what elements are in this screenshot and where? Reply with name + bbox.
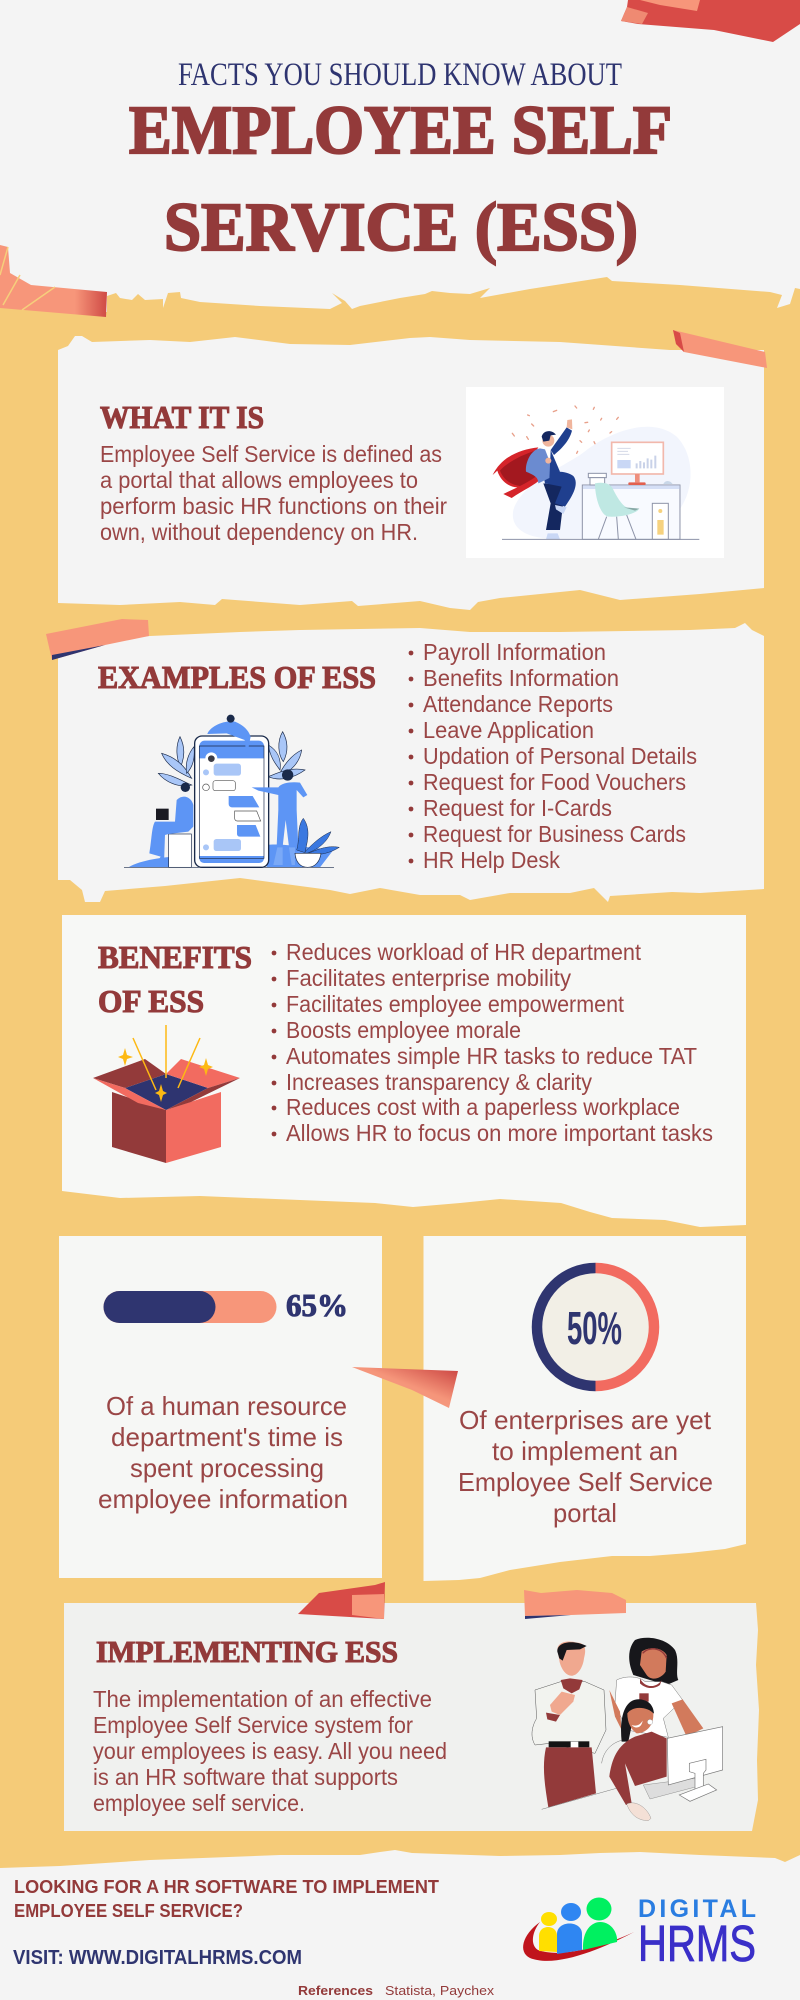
value: 65%	[286, 1287, 348, 1323]
main title line 2: SERVICE (ESS)	[164, 189, 638, 265]
bullet list: Increases transparency & clarity	[286, 1069, 592, 1095]
footer call to action	[13, 1877, 439, 1969]
heading: EXAMPLES OF ESS	[98, 659, 376, 695]
donut chart	[536, 1267, 656, 1387]
body text: Employee Self Service system for	[93, 1712, 413, 1738]
description	[458, 1405, 713, 1528]
ground	[502, 538, 699, 541]
description	[98, 1391, 348, 1514]
monitor	[612, 442, 663, 474]
tape	[673, 330, 767, 368]
body text: a portal that allows employees to	[100, 467, 418, 493]
description: Employee Self Service	[458, 1467, 713, 1497]
panel: 50 percent stat	[424, 1236, 746, 1581]
chair	[598, 515, 636, 539]
subtitle: FACTS YOU SHOULD KNOW ABOUT	[178, 57, 622, 93]
description: portal	[553, 1498, 617, 1528]
yellow torn background band	[0, 277, 800, 1868]
description: employee information	[98, 1484, 348, 1514]
bullet list: Payroll Information	[423, 639, 606, 665]
logo swoosh	[523, 1922, 634, 1961]
description: Of enterprises are yet	[459, 1405, 712, 1435]
references: Statista, Paychex	[385, 1984, 495, 1998]
website: VISIT: WWW.DIGITALHRMS.COM	[13, 1947, 302, 1969]
bullet list	[409, 639, 697, 873]
heading	[98, 939, 252, 1019]
keyboard	[643, 1778, 697, 1799]
body text: perform basic HR functions on their	[100, 493, 447, 519]
desk line	[542, 1787, 620, 1809]
description: department's time is	[111, 1422, 343, 1452]
cape	[493, 447, 542, 498]
title block	[129, 57, 672, 265]
main title line 1: EMPLOYEE SELF	[129, 92, 672, 168]
bullet list: Updation of Personal Details	[423, 743, 697, 769]
person left	[149, 797, 193, 864]
body text	[100, 441, 447, 545]
bullet list: Reduces workload of HR department	[286, 939, 642, 965]
bullet list: Attendance Reports	[423, 691, 613, 717]
cta line 2: EMPLOYEE SELF SERVICE?	[14, 1901, 243, 1921]
body text	[93, 1686, 447, 1816]
man	[532, 1682, 606, 1753]
torso	[543, 448, 560, 477]
person top	[207, 721, 251, 757]
body text: is an HR software that supports	[93, 1764, 398, 1790]
bullet list: Boosts employee morale	[286, 1017, 521, 1043]
legs	[543, 483, 563, 530]
tape: left salmon	[0, 245, 107, 317]
description: spent processing	[130, 1453, 324, 1483]
tape	[46, 619, 149, 660]
heading: OF ESS	[98, 983, 204, 1019]
chat bubbles	[214, 764, 241, 776]
bullet list: Request for I-Cards	[423, 795, 612, 821]
icon: open gift box	[93, 1025, 240, 1163]
panel: benefits of ESS	[62, 915, 746, 1227]
leaves	[158, 732, 305, 786]
person right	[252, 782, 307, 847]
desk box	[588, 473, 606, 478]
confetti	[512, 406, 618, 453]
description: Of a human resource	[106, 1391, 347, 1421]
arm	[551, 427, 572, 455]
tower	[652, 503, 668, 539]
panel: what it is	[58, 330, 767, 610]
bullet list: Facilitates employee empowerment	[286, 991, 625, 1017]
bullet list: Request for Food Vouchers	[423, 769, 686, 795]
phone	[195, 736, 269, 867]
cta line 1: LOOKING FOR A HR SOFTWARE TO IMPLEMENT	[14, 1877, 439, 1897]
panel: 65 percent stat	[59, 1236, 382, 1578]
bullet list: HR Help Desk	[423, 847, 560, 873]
heading: WHAT IT IS	[100, 399, 264, 435]
logo: Digital HRMS: HRMS	[638, 1915, 756, 1972]
tape: triangle between stat panels	[352, 1367, 458, 1408]
logo: Digital HRMS	[523, 1895, 756, 1972]
body text: own, without dependency on HR.	[100, 519, 418, 545]
description: to implement an	[492, 1436, 678, 1466]
bullet list: Automates simple HR tasks to reduce TAT	[286, 1043, 697, 1069]
bullet list: Facilitates enterprise mobility	[286, 965, 571, 991]
bullet list: Allows HR to focus on more important tasks	[286, 1120, 713, 1146]
body text: The implementation of an effective	[93, 1686, 432, 1712]
bullet list: Leave Application	[423, 717, 594, 743]
panel: examples of ESS	[46, 619, 764, 902]
panel: implementing ESS	[64, 1582, 759, 1831]
ground	[124, 866, 334, 868]
head	[542, 435, 554, 447]
monitor	[667, 1727, 723, 1785]
heading: IMPLEMENTING ESS	[96, 1634, 398, 1669]
woman standing	[629, 1638, 678, 1685]
illustration: phone chat team	[124, 715, 339, 867]
progress bar	[104, 1291, 276, 1323]
value: 50%	[567, 1302, 622, 1354]
tape: salmon	[524, 1590, 626, 1619]
desk	[582, 485, 680, 539]
logo wordmark: DIGITAL	[638, 1895, 756, 1923]
references	[298, 1984, 495, 1998]
seated woman	[602, 1740, 623, 1763]
illustration card: superhero employee	[466, 387, 724, 558]
bullet list	[272, 939, 713, 1146]
stool	[169, 834, 191, 867]
body text: your employees is easy. All you need	[93, 1738, 447, 1764]
tape: top right red	[621, 0, 800, 42]
heading: BENEFITS	[98, 939, 252, 975]
tape: red	[298, 1582, 385, 1619]
body text: employee self service.	[93, 1790, 305, 1816]
illustration: three colleagues at a computer	[532, 1638, 723, 1821]
bullet list: Benefits Information	[423, 665, 619, 691]
logo people	[541, 1912, 557, 1926]
plant	[297, 818, 339, 855]
body text: Employee Self Service is defined as	[100, 441, 442, 467]
bullet list: Request for Business Cards	[423, 821, 686, 847]
references: References	[298, 1984, 373, 1998]
bullet list: Reduces cost with a paperless workplace	[286, 1094, 680, 1120]
